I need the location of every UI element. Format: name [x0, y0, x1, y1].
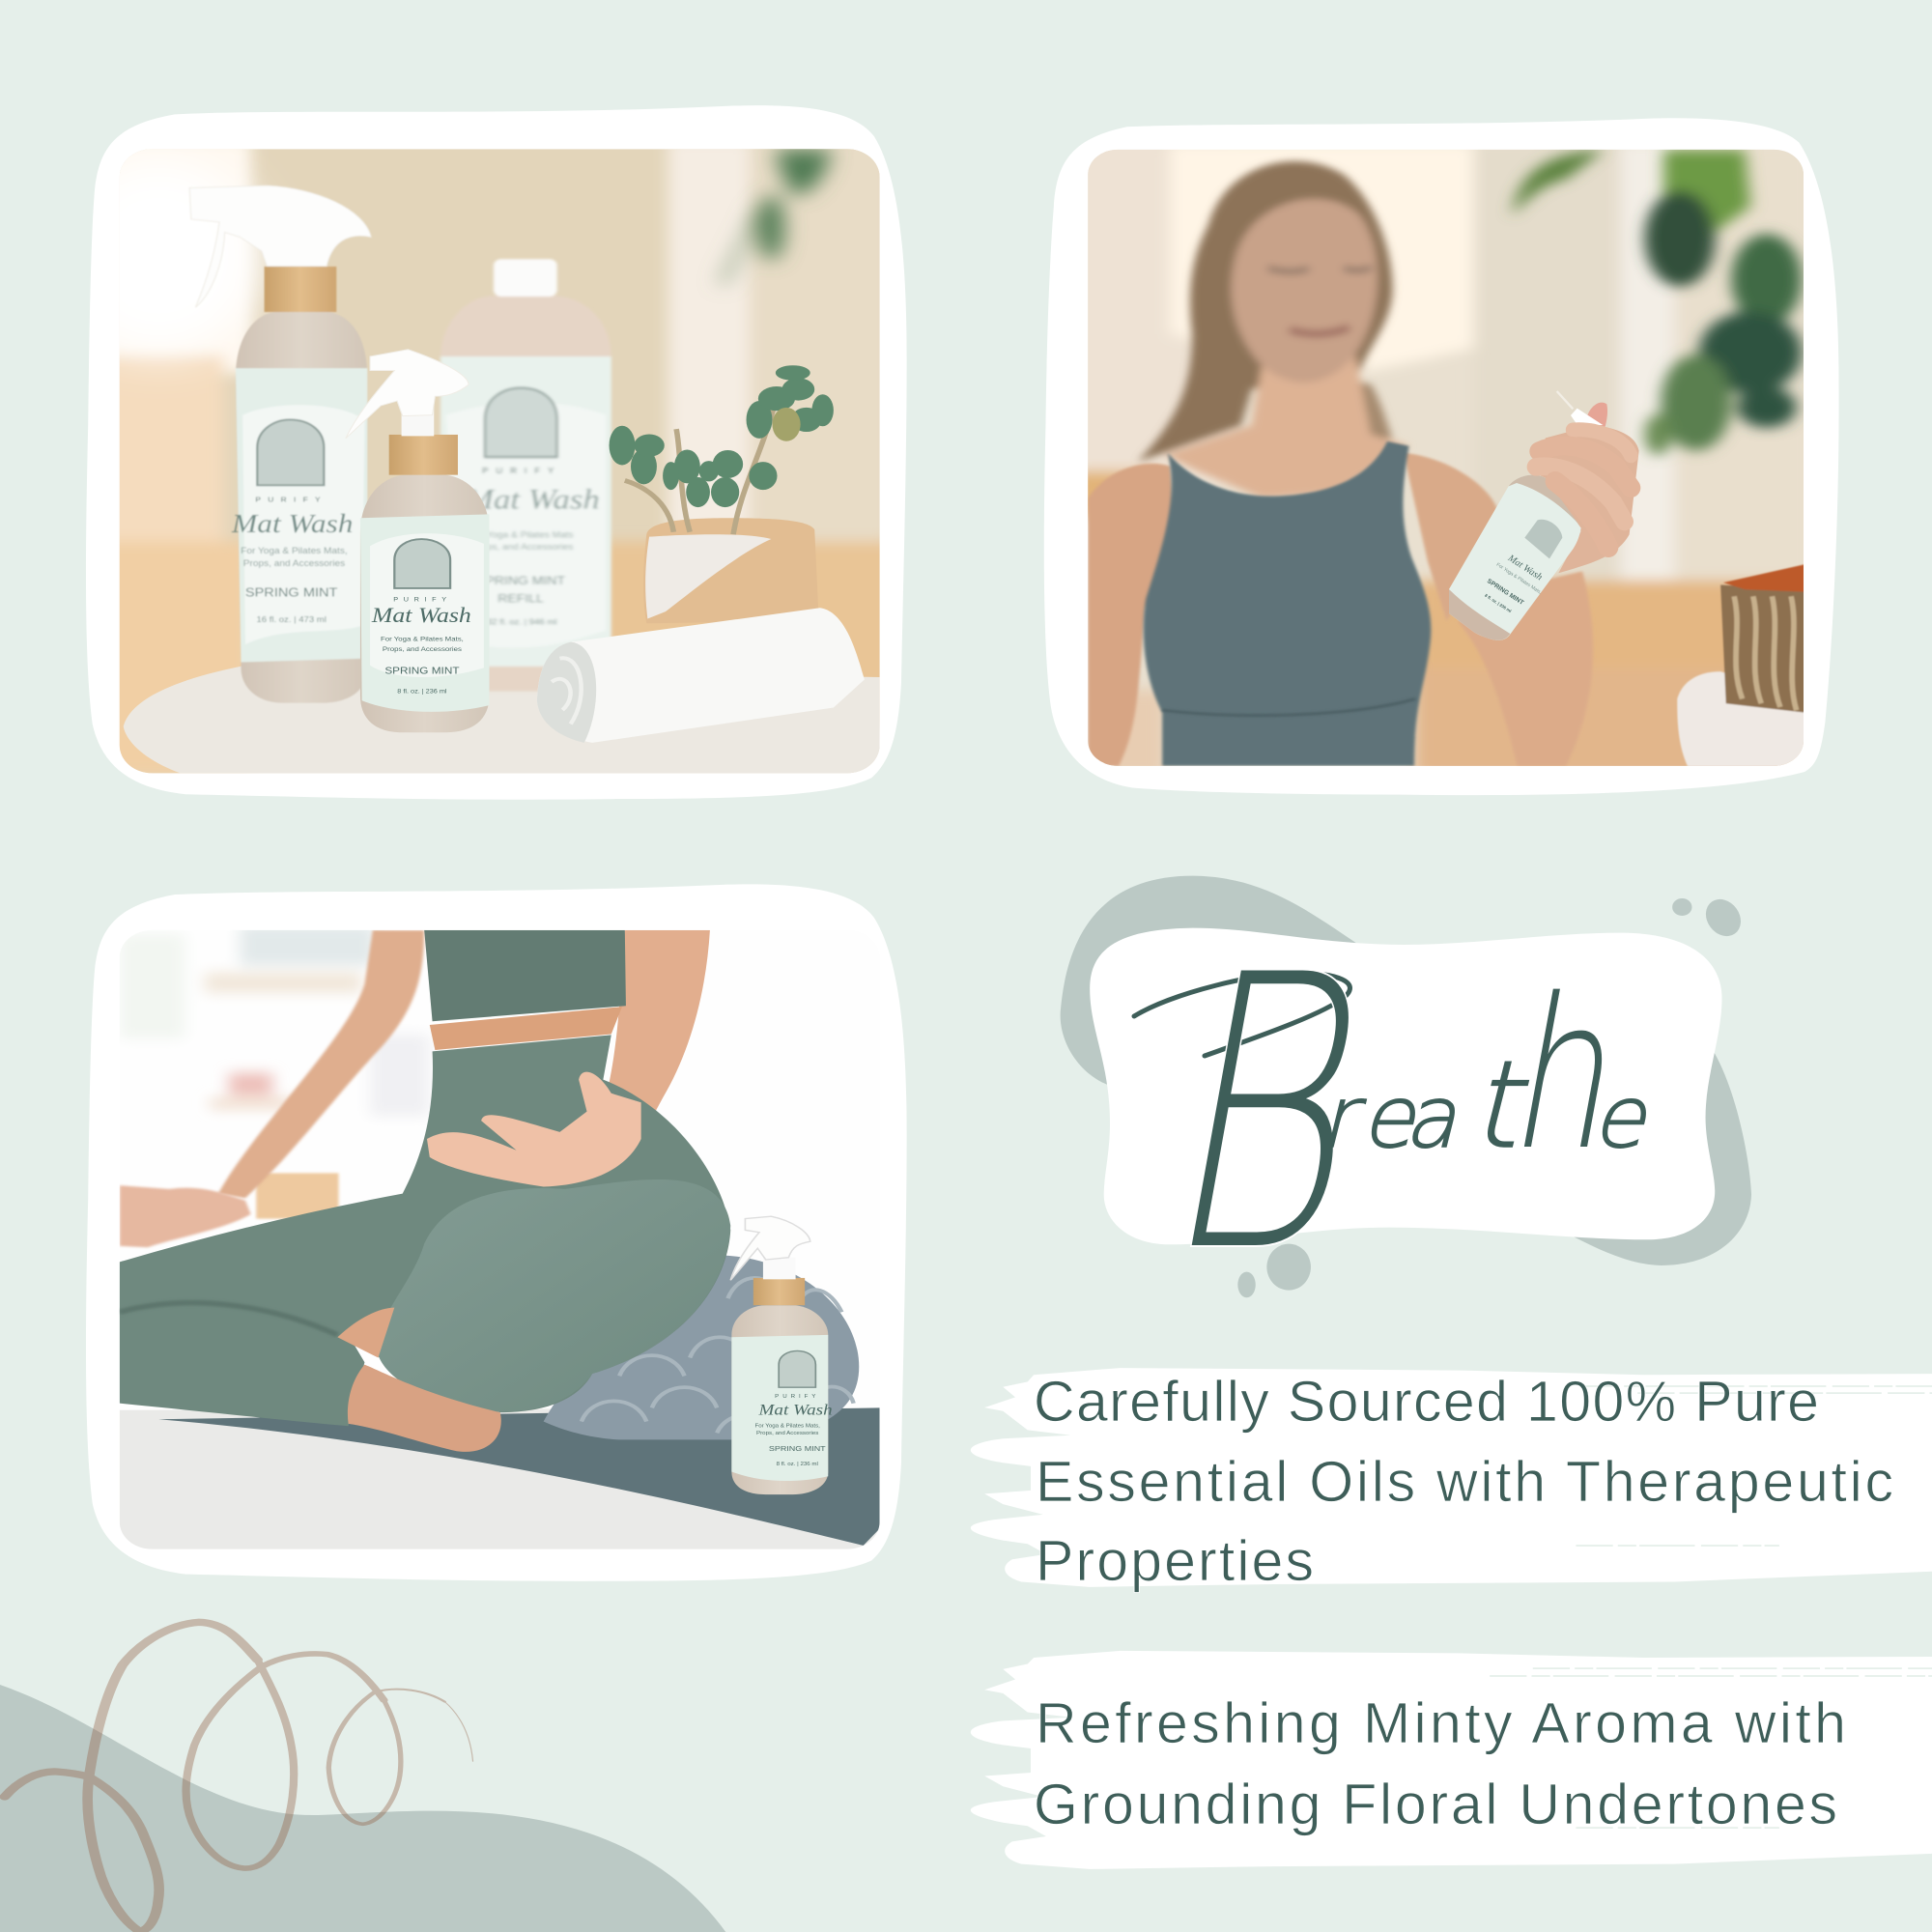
- spray bottle on mat: For Yoga & Pilates Mats,: [754, 1424, 820, 1430]
- background blobs: [1061, 876, 1751, 1297]
- white badge panel: [1090, 928, 1722, 1244]
- title swash: [1134, 973, 1350, 1056]
- mini bottle: 8 fl. oz. | 236 ml: [1484, 593, 1512, 613]
- benefit text 1: Properties: [1036, 1529, 1314, 1593]
- large spray bottle: 16 fl. oz. | 473 ml: [256, 614, 327, 624]
- card frame: [86, 884, 907, 1581]
- bolster cushion: [544, 1255, 859, 1439]
- large spray bottle: [189, 185, 371, 703]
- top and leggings: [120, 930, 730, 1426]
- spray bottle on mat: Props, and Accessories: [756, 1431, 819, 1436]
- large spray bottle: Props, and Accessories: [243, 558, 345, 568]
- small spray bottle: [346, 350, 490, 732]
- large spray bottle: For Yoga & Pilates Mats,: [241, 546, 348, 555]
- palm: [1533, 425, 1639, 573]
- spray bottle on mat: Mat Wash: [757, 1401, 833, 1418]
- large spray bottle: SPRING MINT: [245, 586, 338, 599]
- title: Breathe: e: [1592, 1067, 1647, 1167]
- title: Breathe: h: [1507, 953, 1605, 1196]
- refill bottle: Yoga & Pilates Mats: [487, 529, 574, 539]
- fingers: [1536, 430, 1631, 548]
- thumb: [1587, 403, 1607, 427]
- mini bottle: SPRING MINT: [1486, 578, 1524, 607]
- spray bottle on mat: PURIFY: [775, 1394, 819, 1400]
- refill bottle: ps, and Accessories: [487, 542, 574, 552]
- small spray bottle: For Yoga & Pilates Mats,: [381, 635, 464, 643]
- refill bottle: PURIFY: [482, 467, 561, 475]
- small spray bottle: Props, and Accessories: [383, 644, 462, 653]
- refill bottle: Mat Wash: [465, 484, 600, 516]
- small spray bottle: 8 fl. oz. | 236 ml: [397, 689, 447, 695]
- refill bottle: 32 fl. oz. | 946 ml: [487, 617, 556, 626]
- title: Breathe: rea: [1320, 1067, 1456, 1167]
- large spray bottle: PURIFY: [255, 496, 327, 503]
- woman's neck, hair and face: [1138, 161, 1408, 498]
- table top: [124, 666, 880, 773]
- photo card: woman spraying: [1044, 118, 1839, 795]
- floor and mat: [120, 1407, 880, 1549]
- feet: [337, 1308, 501, 1452]
- brush stroke text panel 2: [971, 1651, 1932, 1869]
- resting hand: [427, 1072, 641, 1187]
- title: Breathe: B: [1157, 894, 1353, 1336]
- decorative scribble spiral: [5, 1622, 473, 1931]
- spray bottle on mat: 8 fl. oz. | 236 ml: [777, 1462, 818, 1467]
- large spray bottle: Mat Wash: [231, 510, 354, 538]
- rolled towel: [537, 608, 865, 743]
- woven basket on stand: [1677, 564, 1804, 767]
- benefit text 1: Essential Oils with Therapeutic: [1036, 1450, 1893, 1514]
- refill bottle: REFILL: [497, 591, 544, 605]
- spray bottle on mat: [730, 1216, 833, 1494]
- card frame: [86, 105, 907, 800]
- mini bottle: [1449, 475, 1581, 640]
- photo: woman spraying mist: [1073, 143, 1815, 777]
- photo: bottles on a table: [120, 149, 880, 773]
- small spray bottle: SPRING MINT: [384, 666, 460, 676]
- brush stroke text panel 1: [971, 1368, 1932, 1587]
- small spray bottle: PURIFY: [393, 597, 452, 603]
- potted plant: [610, 365, 834, 623]
- spray nozzle and mist: [1557, 391, 1603, 426]
- benefit text 1: Carefully Sourced 100% Pure: [1034, 1370, 1819, 1434]
- mini bottle: For Yoga & Pilates Mats,: [1495, 562, 1543, 596]
- mini bottle: Mat Wash: [1505, 553, 1544, 582]
- photo card: seated meditation: [86, 884, 907, 1581]
- benefit text 2: Grounding Floral Undertones: [1034, 1773, 1837, 1836]
- arms and hand: [120, 930, 710, 1247]
- refill bottle: SPRING MINT: [476, 574, 565, 587]
- title: Breathe: t: [1470, 1036, 1529, 1176]
- refill bottle: [440, 259, 611, 692]
- spray bottle on mat: SPRING MINT: [769, 1443, 826, 1453]
- photo: seated meditation with bottle: [120, 924, 880, 1549]
- title badge: [1061, 876, 1751, 1336]
- small spray bottle: Mat Wash: [371, 604, 471, 627]
- card frame: [1044, 118, 1839, 795]
- hand holding spray bottle: [1449, 391, 1639, 640]
- photo card: product bottles: [56, 105, 907, 800]
- benefit text 2: Refreshing Minty Aroma with: [1036, 1691, 1846, 1755]
- decorative wave bottom left: [0, 1685, 725, 1932]
- woman's body and tank top: [1088, 441, 1593, 766]
